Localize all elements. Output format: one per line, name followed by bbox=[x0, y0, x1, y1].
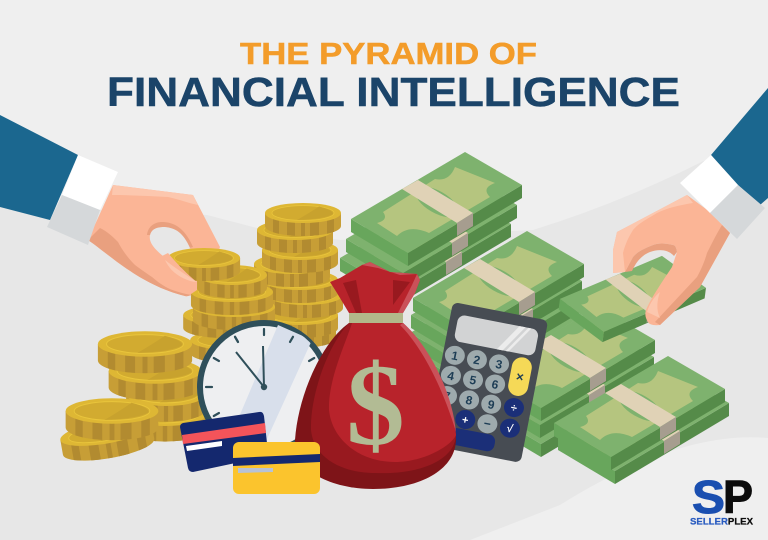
coin tower right bbox=[254, 203, 343, 351]
title line 2: FINANCIAL INTELLIGENCE bbox=[107, 69, 680, 115]
calculator: 1 bbox=[450, 348, 460, 363]
calculator: 8 bbox=[464, 393, 474, 408]
calculator bbox=[425, 302, 548, 463]
calculator: × bbox=[515, 369, 526, 385]
calculator: = bbox=[443, 427, 454, 443]
right sleeve bbox=[680, 88, 768, 239]
calculator: − bbox=[483, 416, 492, 431]
calculator: 5 bbox=[468, 373, 478, 388]
money bag: $ bbox=[346, 341, 405, 470]
money stacks behind bbox=[340, 152, 655, 457]
calculator: 4 bbox=[446, 368, 456, 384]
credit card yellow bbox=[233, 442, 320, 494]
calculator: 2 bbox=[472, 353, 482, 368]
left hand thumb bbox=[150, 253, 197, 296]
credit card navy bbox=[180, 412, 268, 472]
logo bbox=[690, 471, 754, 528]
logo mark S: S bbox=[692, 471, 725, 523]
calculator: 3 bbox=[494, 357, 504, 372]
calculator: + bbox=[461, 414, 469, 427]
front money stack bbox=[554, 356, 729, 484]
logo wordmark: SELLERPLEX bbox=[690, 516, 754, 528]
clock bbox=[200, 323, 328, 451]
calculator: 6 bbox=[490, 377, 500, 392]
calculator: 9 bbox=[486, 397, 496, 412]
calculator: 7 bbox=[442, 389, 452, 404]
right hand bbox=[613, 195, 730, 325]
right stack bbox=[483, 307, 655, 457]
left sleeve bbox=[0, 115, 118, 245]
middle stack bbox=[410, 231, 584, 398]
title bbox=[107, 36, 680, 115]
left hand bbox=[88, 185, 220, 296]
calculator: √ bbox=[506, 423, 515, 436]
title line 1: THE PYRAMID OF bbox=[240, 36, 537, 71]
coin tower left bbox=[168, 248, 275, 366]
calculator: ÷ bbox=[510, 402, 518, 415]
money bag bbox=[295, 262, 456, 489]
back stack bbox=[340, 152, 522, 305]
logo mark P: P bbox=[723, 471, 753, 523]
coin pile lower left bbox=[58, 331, 207, 469]
bills held in right hand bbox=[555, 245, 709, 353]
